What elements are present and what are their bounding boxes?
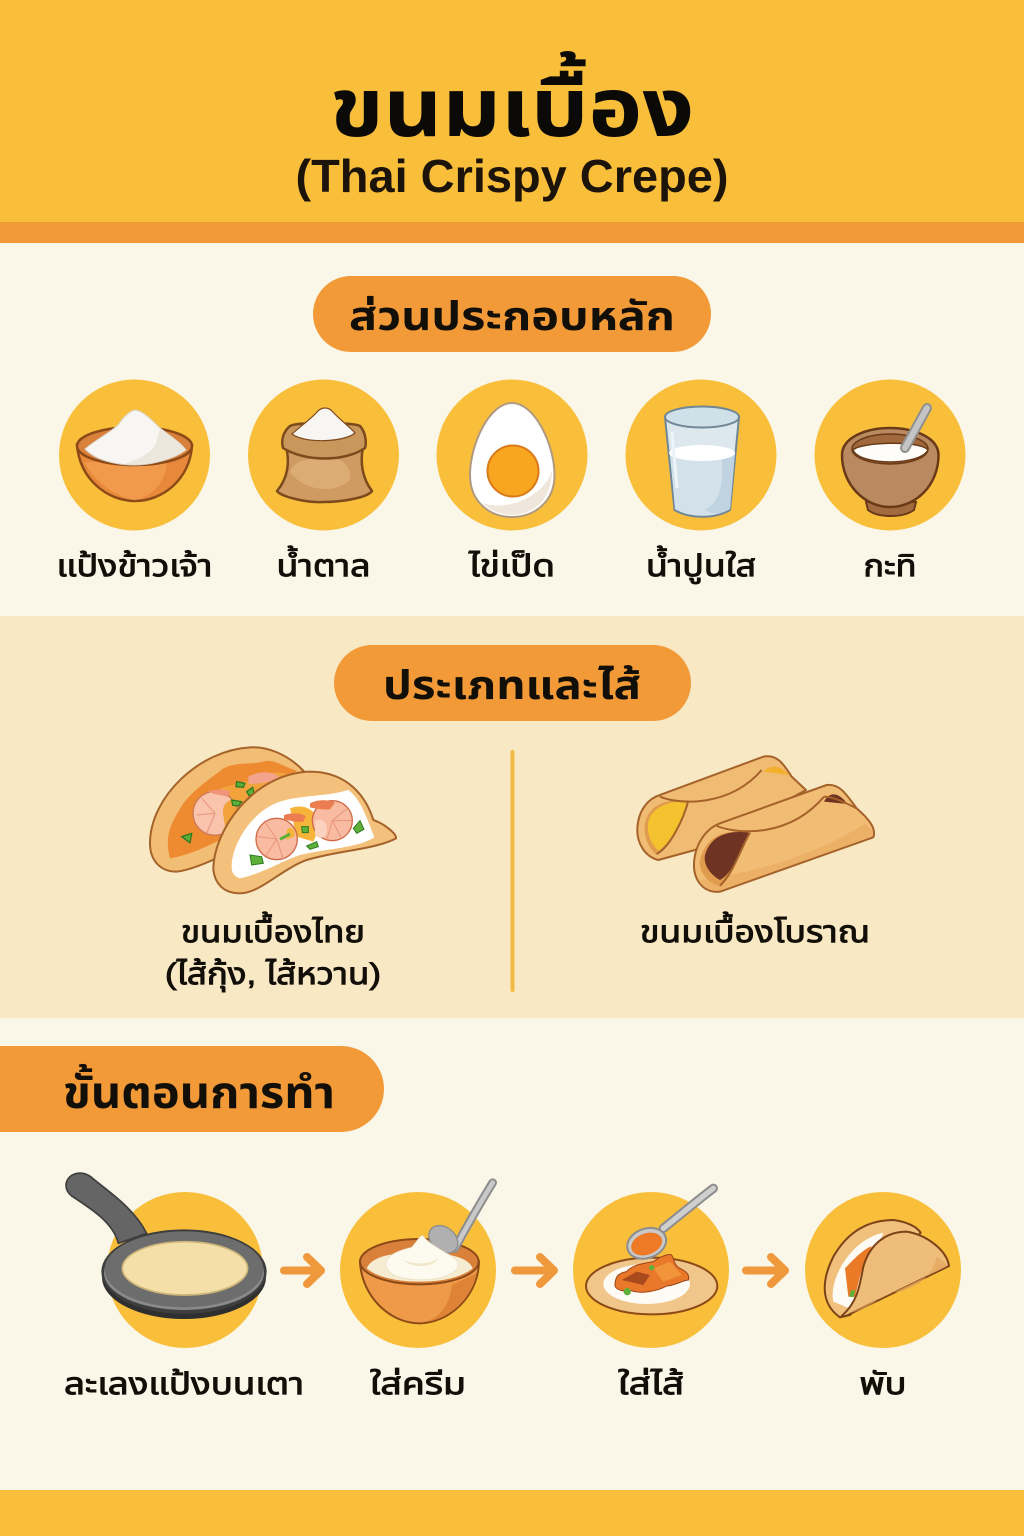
label: Thai crepe: ขนมเบื้องไทย — [181, 911, 365, 949]
step 1: spread batter on griddle — [64, 1173, 304, 1401]
label: น้ำปูนใส — [646, 545, 756, 584]
label: ใส่ไส้ — [618, 1368, 684, 1401]
heading: steps — [0, 1046, 384, 1132]
step 2: add cream — [340, 1183, 496, 1401]
arrow — [515, 1257, 554, 1284]
footer band — [0, 1490, 1024, 1536]
title: ขนมเบื้อง — [330, 50, 694, 154]
label: ละเลงแป้งบนเตา — [64, 1368, 304, 1401]
arrow — [284, 1257, 321, 1284]
subtitle: (Thai Crispy Crepe) — [296, 150, 728, 202]
ingredient: duck egg — [436, 380, 588, 583]
heading: ingredients: ส่วนประกอบหลัก — [349, 294, 675, 339]
label: แป้งข้าวเจ้า — [56, 550, 213, 583]
panel: steps — [0, 1018, 1024, 1490]
illustration: Thai crepes with shrimp — [150, 747, 396, 893]
panel: types and fillings — [0, 616, 1024, 1018]
label: ใส่ครีม — [370, 1368, 466, 1401]
step 4: fold — [805, 1192, 961, 1401]
label: traditional crepe: ขนมเบื้องโบราณ — [640, 911, 870, 949]
label: fillings: (ไส้กุ้ง, ไส้หวาน) — [165, 958, 381, 992]
ingredient: sugar — [248, 380, 399, 583]
label: กะทิ — [864, 550, 916, 583]
heading: types — [334, 645, 691, 721]
label: พับ — [860, 1368, 906, 1401]
arrow — [746, 1257, 785, 1284]
step 3: add filling — [573, 1188, 729, 1401]
divider — [510, 750, 514, 992]
heading: types: ประเภทและไส้ — [383, 663, 641, 708]
illustration: traditional rolled crepes — [637, 756, 874, 892]
ingredient: limewater — [626, 380, 776, 584]
header band — [0, 0, 1024, 243]
label: น้ำตาล — [276, 545, 370, 583]
ingredient: coconut milk — [814, 380, 966, 583]
ingredient: rice flour — [56, 380, 213, 583]
label: ไข่เป็ด — [468, 550, 555, 583]
heading: ingredients — [313, 276, 711, 352]
panel: ingredients — [0, 243, 1024, 616]
heading: steps: ขั้นตอนการทำ — [63, 1064, 335, 1118]
